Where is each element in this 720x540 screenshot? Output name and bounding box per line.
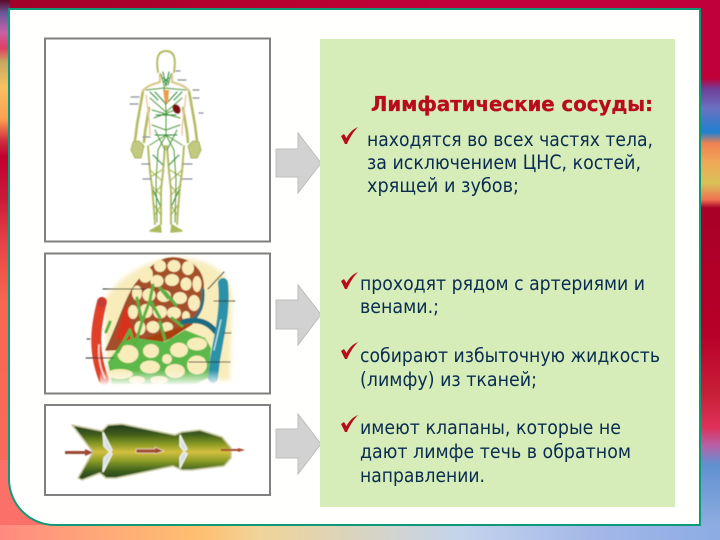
icon: check mark 2 bbox=[341, 272, 358, 289]
list item: all body parts: хрящей и зубов; bbox=[367, 174, 519, 197]
list item: valves: направлении. bbox=[360, 464, 485, 487]
icon: check mark 4 bbox=[341, 415, 358, 432]
icon: check mark 3 bbox=[341, 342, 358, 359]
list item: all body parts: находятся во всех частях тела, bbox=[367, 128, 653, 151]
list item: all body parts bbox=[367, 128, 653, 197]
brown net bbox=[106, 258, 203, 350]
arrow: first picture to text bbox=[276, 133, 321, 193]
green mesh bbox=[108, 330, 211, 384]
panel: text on green background bbox=[320, 39, 675, 507]
picture frame: lymphatic system of the body bbox=[45, 38, 270, 242]
list item: near arteries and veins bbox=[360, 272, 645, 318]
list item: valves: имеют клапаны, которые не bbox=[360, 416, 621, 439]
arrow: second picture to text bbox=[276, 285, 321, 345]
illustration: vessel section with valves and flow arrows bbox=[65, 424, 245, 480]
arrow: third picture to text bbox=[276, 414, 321, 474]
list item: valves bbox=[360, 416, 631, 487]
list item: near arteries and veins: венами.; bbox=[360, 295, 439, 318]
list item: collect excess fluid bbox=[360, 344, 660, 391]
list item: collect excess fluid: (лимфу) из тканей; bbox=[360, 368, 537, 391]
heading: Лимфатические сосуды: bbox=[371, 92, 653, 116]
list item: valves: дают лимфе течь в обратном bbox=[360, 440, 631, 463]
list item: near arteries and veins: проходят рядом с артериями и bbox=[360, 272, 645, 295]
picture frame: lymph vessel with valves bbox=[45, 405, 270, 495]
list item: collect excess fluid: собирают избыточную жидкость bbox=[360, 344, 660, 367]
picture frame: capillary network bbox=[45, 254, 270, 394]
illustration: human figure with lymph network bbox=[130, 51, 203, 232]
icon: check mark 1 bbox=[341, 127, 358, 144]
illustration: artery, vein and lymph capillaries bbox=[86, 258, 235, 386]
list item: all body parts: за исключением ЦНС, костей, bbox=[367, 151, 641, 174]
